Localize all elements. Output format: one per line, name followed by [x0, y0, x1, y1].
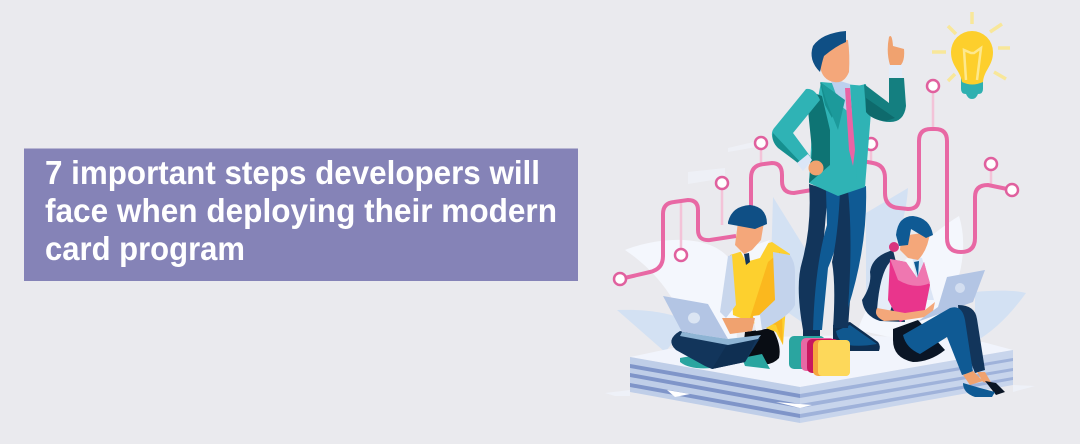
ponytail [862, 250, 905, 322]
icon: light bulb [932, 12, 1010, 99]
figure: seated woman [862, 216, 1005, 397]
wire nodes [614, 80, 1018, 285]
title banner [24, 148, 578, 281]
title banner: card program [45, 230, 245, 267]
hair [896, 216, 933, 246]
title banner: 7 important steps developers will [45, 154, 540, 191]
dark hips and back leg [893, 320, 945, 362]
vest and sleeve [730, 242, 790, 345]
shirt [877, 260, 900, 312]
shoes [803, 322, 880, 351]
platform [630, 335, 1013, 423]
hands [722, 318, 755, 334]
laptop [663, 296, 728, 339]
figure: seated man [663, 205, 795, 369]
card stack [789, 336, 850, 376]
jacket [809, 82, 871, 196]
laptop [917, 270, 985, 322]
background leaves [605, 140, 1035, 396]
title banner: face when deploying their modern [45, 192, 557, 229]
cuff and pointing hand [889, 64, 902, 78]
face and hand [820, 40, 849, 82]
right arm [864, 78, 906, 122]
head [900, 232, 930, 260]
front leg [903, 307, 973, 375]
shirt and tie [830, 78, 852, 115]
collar and head [740, 240, 770, 262]
hair [812, 31, 846, 72]
circuit wires [620, 92, 1012, 279]
trousers [799, 184, 828, 330]
illustration: developers on a platform [605, 12, 1035, 423]
figure: standing man [772, 31, 906, 351]
pink vest [888, 259, 930, 322]
legs [742, 328, 780, 364]
arm [876, 302, 935, 321]
ankles and shoes [963, 371, 992, 385]
